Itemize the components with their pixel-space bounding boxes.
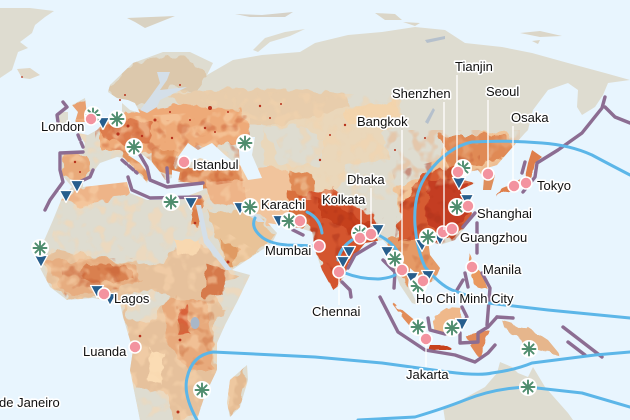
blue triangle markers: [34, 118, 474, 330]
city: Guangzhou: [437, 226, 527, 245]
city: Seoul: Seoul: [486, 84, 519, 99]
city: Istanbul: Istanbul: [193, 157, 239, 172]
city label: Rio de Janeiro, cropped at the left edge: de Janeiro: [0, 395, 60, 410]
city: Shanghai: [462, 200, 532, 221]
purple chokepoint and shipping lanes: [45, 97, 630, 362]
city: Guangzhou: Guangzhou: [460, 230, 527, 245]
city: Tianjin: [452, 59, 493, 178]
city: Chennai: [312, 266, 361, 319]
city: Luanda: [83, 341, 141, 359]
city: Shanghai: Shanghai: [477, 206, 532, 221]
city: Lagos: Lagos: [114, 291, 150, 306]
city: Mumbai: Mumbai: [265, 243, 311, 258]
blue shipping routes: [186, 141, 630, 420]
city: London: London: [41, 119, 84, 134]
city: Tokyo: [520, 177, 571, 193]
city: Lagos: [98, 288, 150, 306]
city: Tokyo: Tokyo: [537, 178, 571, 193]
city: Karachi: [261, 197, 306, 227]
city: Mumbai: [265, 240, 325, 258]
population density choropleth: [40, 55, 562, 420]
city: Seoul: [482, 84, 519, 180]
city: Bangkok: Bangkok: [357, 114, 408, 129]
city: Shenzhen: [392, 86, 458, 235]
city: Kolkata: [322, 192, 366, 244]
city: Manila: Manila: [483, 262, 522, 277]
city: Ho Chi Minh City: Ho Chi Minh City: [416, 291, 514, 306]
city: Bangkok: [357, 114, 408, 276]
city: Jakarta: [406, 333, 449, 382]
choropleth patch texture: lighter: [40, 90, 520, 420]
city: Tianjin: Tianjin: [455, 59, 493, 74]
city: Dhaka: [347, 172, 385, 240]
city: Osaka: [508, 110, 549, 192]
inland seas and lakes: [83, 36, 445, 329]
city: Chennai: Chennai: [312, 304, 361, 319]
green asterisk markers: [31, 106, 538, 399]
city: London: [41, 113, 97, 134]
city: Kolkata: Kolkata: [322, 192, 366, 207]
city: Luanda: Luanda: [83, 344, 127, 359]
city: Ho Chi Minh City: [416, 275, 514, 306]
city: Jakarta: Jakarta: [406, 367, 449, 382]
city: Karachi: Karachi: [261, 197, 305, 212]
choropleth patch texture: darker: [60, 115, 480, 370]
city: Shenzhen: Shenzhen: [392, 86, 451, 101]
city: Dhaka: Dhaka: [347, 172, 385, 187]
city: Manila: [466, 261, 522, 277]
scattered dense settlement dots: [21, 76, 426, 413]
city: Osaka: Osaka: [511, 110, 549, 125]
